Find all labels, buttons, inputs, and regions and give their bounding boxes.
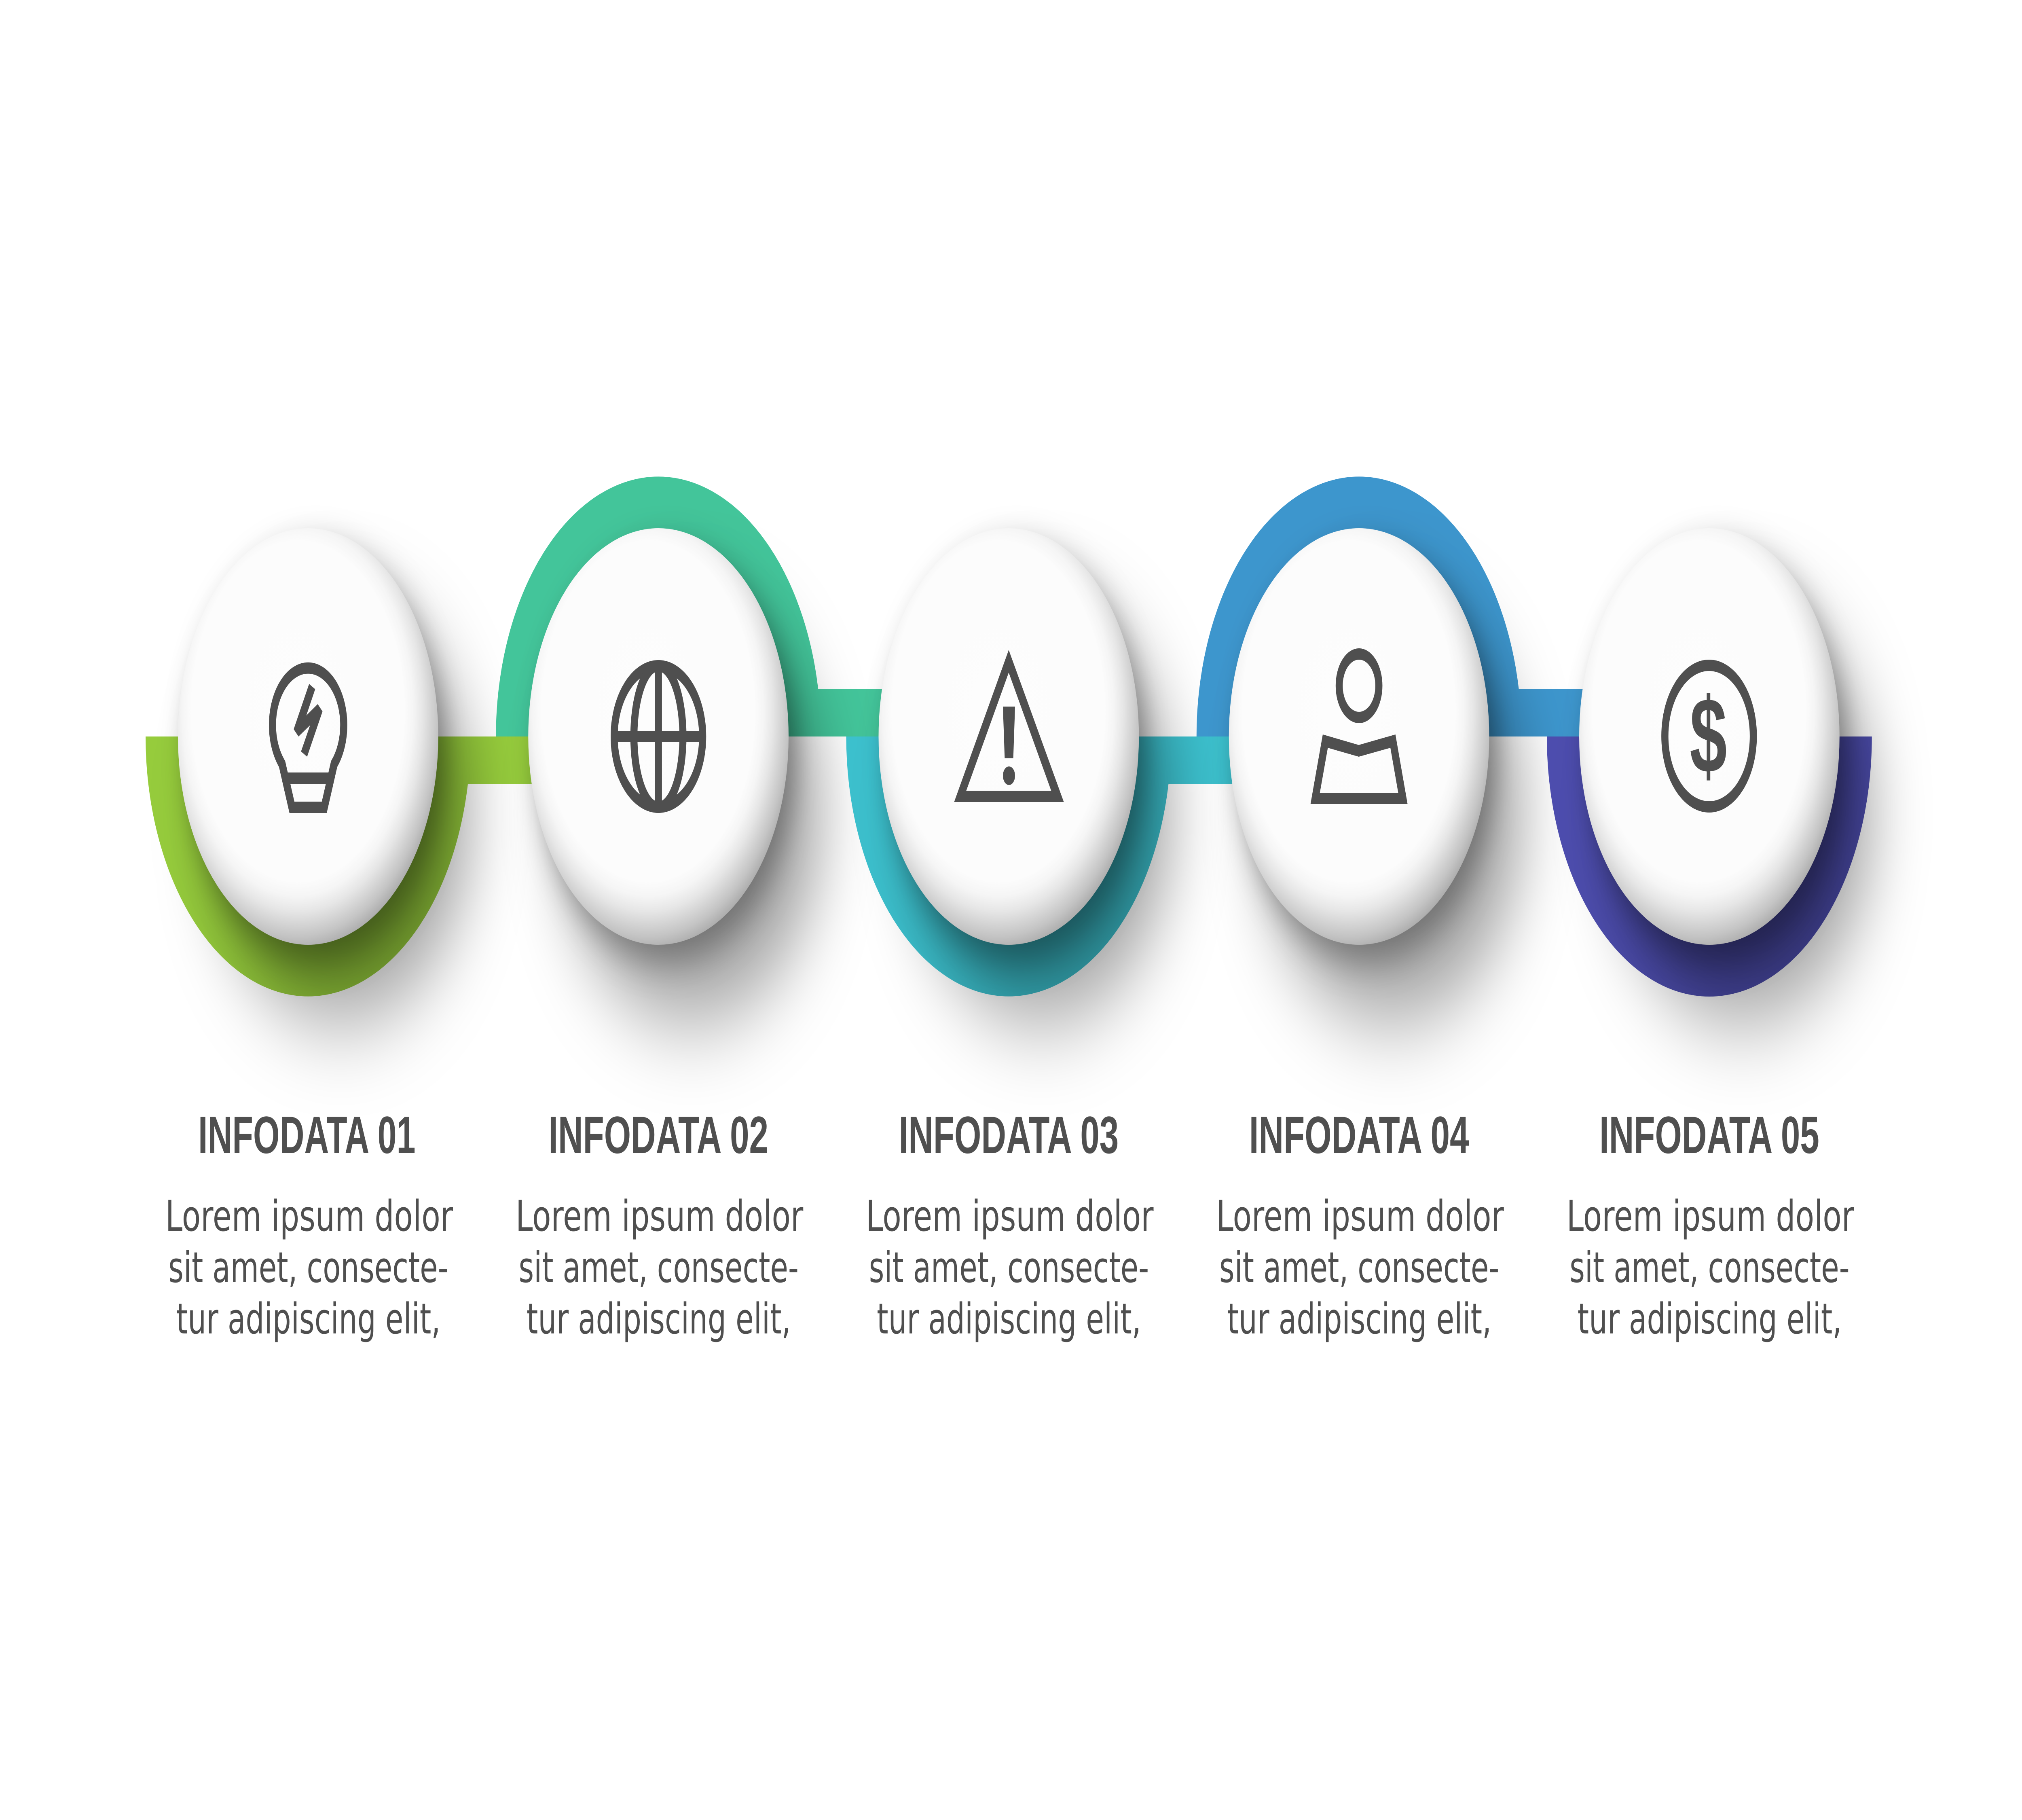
text block 5 bbox=[1567, 1105, 1854, 1344]
disc shadow 4 bbox=[1237, 544, 1522, 1022]
body 1: tur adipiscing elit, bbox=[176, 1295, 440, 1344]
body 4: sit amet, consecte- bbox=[1219, 1244, 1499, 1292]
icon: warning triangle bbox=[954, 650, 1064, 802]
text block 2 bbox=[516, 1105, 804, 1344]
disc shadow 3 bbox=[886, 544, 1172, 1022]
disc 5 bbox=[1579, 528, 1840, 945]
step 3: cyan lower arc with warning disc bbox=[846, 528, 1289, 1022]
heading 3: INFODATA 03 bbox=[899, 1105, 1119, 1164]
body 1 bbox=[165, 1192, 453, 1344]
step 5: indigo lower arc with dollar disc bbox=[1547, 528, 1872, 1022]
disc 2 bbox=[528, 528, 789, 945]
disc shadow 1 bbox=[186, 544, 471, 1022]
body 3: tur adipiscing elit, bbox=[877, 1295, 1141, 1344]
text block 3 bbox=[866, 1105, 1154, 1344]
body 1: sit amet, consecte- bbox=[168, 1244, 448, 1292]
step 4: blue upper arc with map-reader disc bbox=[1197, 476, 1643, 1022]
body 2: sit amet, consecte- bbox=[518, 1244, 799, 1292]
heading 1: INFODATA 01 bbox=[198, 1105, 416, 1164]
body 3 bbox=[866, 1192, 1154, 1344]
text block 4 bbox=[1216, 1105, 1504, 1344]
icon: person with open map bbox=[1311, 654, 1408, 804]
body 2: tur adipiscing elit, bbox=[527, 1295, 791, 1344]
heading 2: INFODATA 02 bbox=[548, 1105, 768, 1164]
body 2 bbox=[516, 1192, 804, 1344]
body 3: Lorem ipsum dolor bbox=[866, 1192, 1154, 1241]
icon: light bulb bbox=[273, 668, 344, 807]
icon: dollar coin: $ bbox=[1690, 675, 1727, 795]
disc 3 bbox=[878, 528, 1139, 945]
body 5: sit amet, consecte- bbox=[1569, 1244, 1850, 1292]
green arc and connector bbox=[146, 736, 582, 997]
body 5 bbox=[1567, 1192, 1854, 1344]
body 4 bbox=[1216, 1192, 1504, 1344]
disc shadow 2 bbox=[536, 544, 821, 1022]
body 4: tur adipiscing elit, bbox=[1227, 1295, 1491, 1344]
icon: dollar coin bbox=[1665, 665, 1753, 807]
heading 4: INFODATA 04 bbox=[1249, 1105, 1469, 1164]
text block 1 bbox=[165, 1105, 453, 1344]
body 2: Lorem ipsum dolor bbox=[516, 1192, 804, 1241]
body 5: tur adipiscing elit, bbox=[1578, 1295, 1842, 1344]
icon: globe bbox=[614, 666, 703, 807]
step 1: green lower arc with bulb disc bbox=[146, 528, 582, 1022]
body 4: Lorem ipsum dolor bbox=[1216, 1192, 1504, 1241]
step 2: teal-green upper arc with globe disc bbox=[496, 476, 935, 1022]
green-teal arc and connector bbox=[496, 476, 935, 736]
body 1: Lorem ipsum dolor bbox=[165, 1192, 453, 1241]
body 3: sit amet, consecte- bbox=[869, 1244, 1149, 1292]
disc 1 bbox=[178, 528, 438, 945]
body 5: Lorem ipsum dolor bbox=[1567, 1192, 1854, 1241]
heading 5: INFODATA 05 bbox=[1599, 1105, 1819, 1164]
cyan arc and connector bbox=[846, 736, 1289, 997]
disc shadow 5 bbox=[1587, 544, 1872, 1022]
indigo arc bbox=[1547, 736, 1872, 997]
disc 4 bbox=[1229, 528, 1489, 945]
blue arc and connector bbox=[1197, 476, 1643, 736]
